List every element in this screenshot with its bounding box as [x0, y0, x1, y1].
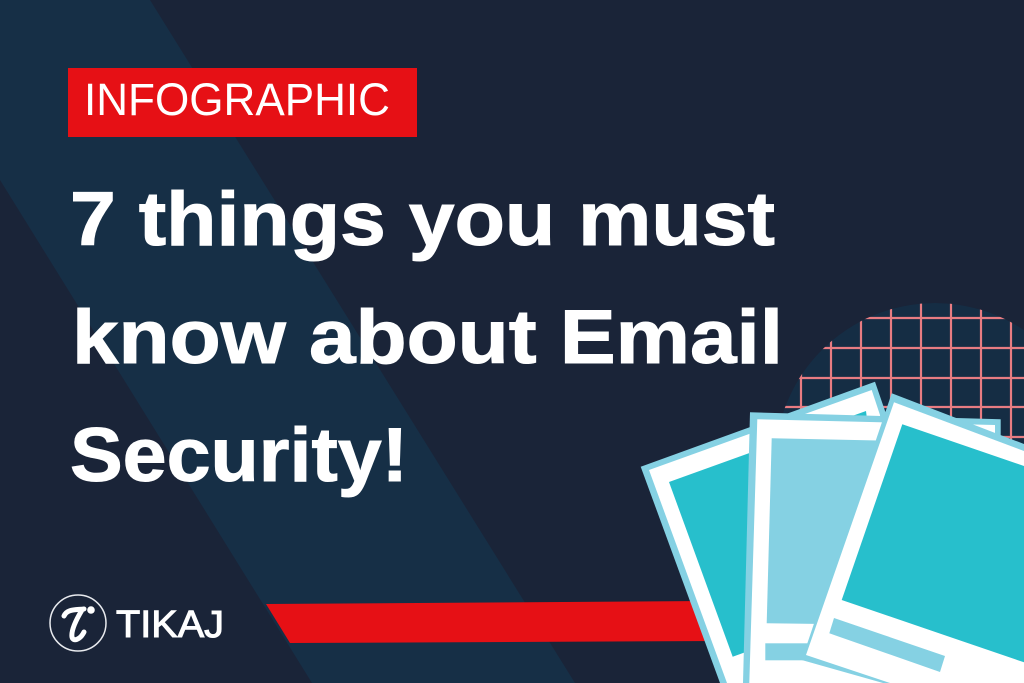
logo: TIKAJ [50, 595, 224, 651]
badge: INFOGRAPHIC [68, 68, 417, 137]
card: back left [641, 382, 900, 683]
title [70, 177, 783, 498]
logo wordmark: TIKAJ [116, 604, 224, 646]
grid circle [784, 303, 1024, 444]
title: 7 things you must [70, 177, 775, 262]
logo mark [50, 595, 106, 651]
title: know about Email [72, 295, 783, 380]
caption bar [765, 643, 825, 660]
red diagonal bar [266, 601, 720, 643]
badge: INFOGRAPHIC: INFOGRAPHIC [84, 74, 390, 125]
title: Security! [70, 413, 408, 498]
caption bar [829, 618, 945, 672]
card: front [802, 393, 1024, 683]
diagonal band [0, 0, 575, 683]
card: middle [743, 412, 1001, 683]
